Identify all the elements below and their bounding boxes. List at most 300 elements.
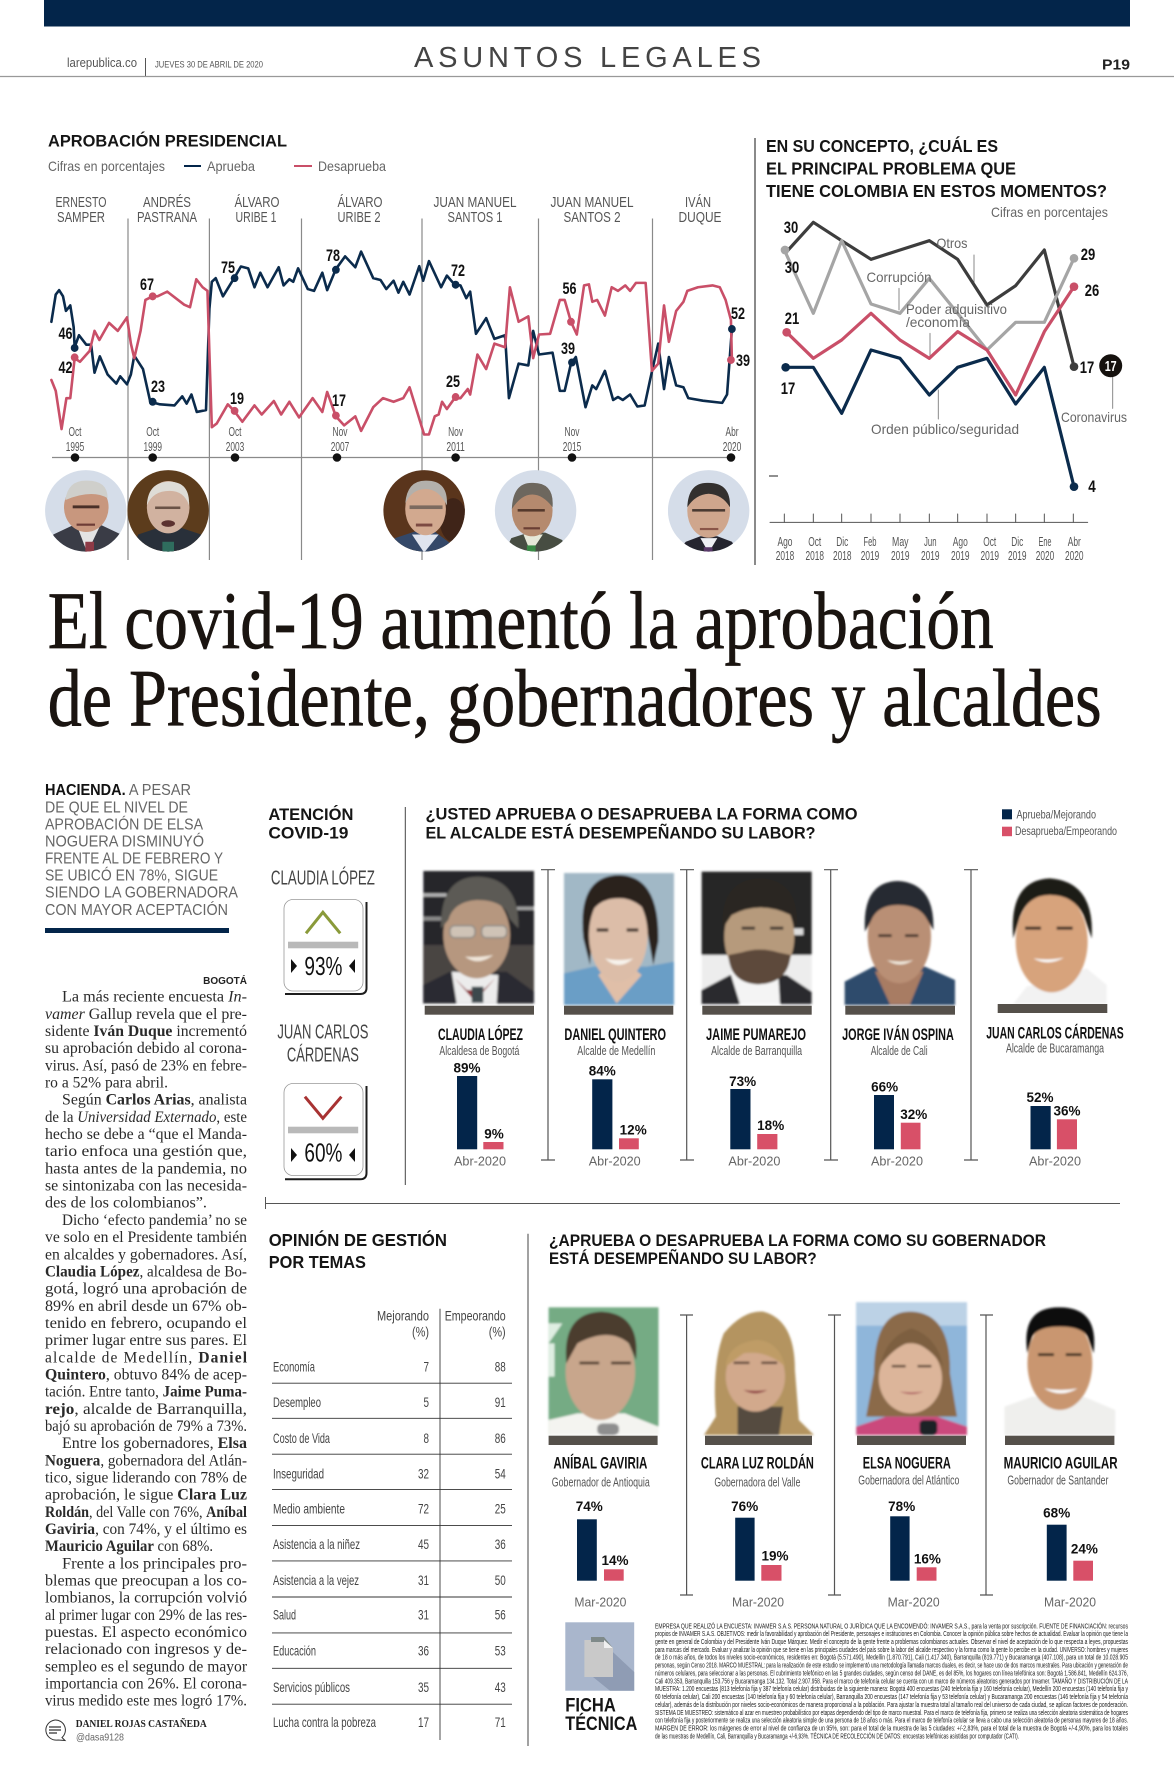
timeline dates: Oct <box>228 424 242 439</box>
bar chart: alcaldes: 9% <box>484 1126 504 1141</box>
governor names <box>553 1453 1118 1472</box>
article body: en alcaldes y gobernadores. Así, <box>45 1246 247 1263</box>
president names <box>56 194 722 226</box>
governor roles: Gobernadora del Atlántico <box>858 1473 959 1487</box>
article body: Noguera, gobernadora del Atlán- <box>45 1452 247 1469</box>
data labels: aprobación: 39 <box>736 351 750 370</box>
article body: blemas que preocupan a los co- <box>45 1572 247 1590</box>
mayor names: DANIEL QUINTERO <box>564 1025 666 1044</box>
bar dates: Abr-2020 <box>454 1154 506 1169</box>
card: 93% <box>284 900 366 994</box>
heading: POR TEMAS <box>269 1252 366 1272</box>
heading: EL ALCALDE ESTÁ DESEMPEÑANDO SU LABOR? <box>426 822 816 842</box>
president names: SANTOS 1 <box>448 210 502 226</box>
table rows: 31 <box>418 1606 429 1622</box>
article body: Gaviria, con 74%, y el último es <box>45 1521 247 1538</box>
card: 60%: 60% <box>304 1138 342 1168</box>
article body: alcalde de Medellín, Daniel <box>45 1349 248 1366</box>
data labels: aprobación: 23 <box>151 377 165 396</box>
mayor roles: Alcaldesa de Bogotá <box>439 1044 519 1058</box>
lead text: hacienda <box>45 782 238 919</box>
governor photos <box>549 1302 1115 1435</box>
table rows: Medio ambiente <box>273 1500 345 1516</box>
legend: Aprueba <box>207 158 255 174</box>
bar dates: Mar-2020 <box>888 1595 940 1610</box>
bar chart: gobernadores <box>576 1499 1098 1581</box>
governor names: ELSA NOGUERA <box>863 1453 951 1472</box>
series labels: Otros <box>936 235 968 251</box>
table header: (%) <box>412 1323 429 1339</box>
x axis dates: Oct <box>808 534 821 549</box>
mayor photos <box>423 871 812 1005</box>
article body: Entre los gobernadores, Elsa <box>62 1435 247 1452</box>
timeline dates: Abr <box>726 424 739 439</box>
governor names: ANÍBAL GAVIRIA <box>553 1453 647 1472</box>
photo: Claudia López <box>423 871 534 1003</box>
x axis dates: 2018 <box>833 548 852 563</box>
x axis dates: 2019 <box>980 548 999 563</box>
data labels: aprobación: 67 <box>140 275 154 294</box>
table rows: 71 <box>495 1714 506 1730</box>
article body: se sintonizaba con las necesida- <box>45 1178 247 1195</box>
byline <box>76 1718 207 1744</box>
x axis dates: May <box>892 534 909 549</box>
bar chart: gobernadores: 14% <box>601 1553 629 1568</box>
x axis dates: Dic <box>1011 534 1024 549</box>
article body: hasta antes de la pandemia, no <box>45 1160 247 1177</box>
table rows: 88 <box>495 1358 506 1374</box>
bar chart: alcaldes: 12% <box>620 1122 647 1137</box>
photo: Elsa Noguera <box>856 1302 967 1435</box>
article body: tación. Entre tanto, Jaime Puma- <box>45 1384 247 1401</box>
article body: importancia con 26%. El corona- <box>45 1676 247 1692</box>
lead text: hacienda: SE UBICÓ EN 78%, SIGUE <box>45 866 218 885</box>
heading: OPINIÓN DE GESTIÓN <box>269 1229 447 1250</box>
photo: Jaime Pumarejo <box>702 872 812 1004</box>
series labels: Corrupción <box>866 269 932 285</box>
timeline dates: 2007 <box>331 439 349 454</box>
table rows: Educación <box>273 1643 316 1659</box>
bar chart: alcaldes: 18% <box>757 1118 784 1133</box>
bar chart: gobernadores: 19% <box>761 1549 789 1564</box>
heading: ¿USTED APRUEBA O DESAPRUEBA LA FORMA COMO <box>426 804 858 823</box>
governor roles <box>552 1473 1108 1490</box>
x axis dates: 2020 <box>1036 548 1054 563</box>
mayor roles <box>439 1041 1104 1058</box>
table rows: Servicios públicos <box>273 1679 350 1695</box>
table rows: 35 <box>418 1679 429 1695</box>
heading: EN SU CONCEPTO, ¿CUÁL ES <box>766 135 998 156</box>
data labels: aprobación: 25 <box>446 372 460 391</box>
timeline dates: 2015 <box>563 439 581 454</box>
heading: ESTÁ DESEMPEÑANDO SU LABOR? <box>549 1248 817 1268</box>
article body: sidente Iván Duque incrementó <box>45 1023 247 1040</box>
legend: Aprueba/Mejorando <box>1016 807 1096 821</box>
data labels: aprobación: 78 <box>326 246 340 265</box>
article body: Según Carlos Arias, analista <box>62 1092 247 1109</box>
table rows: 50 <box>495 1572 506 1588</box>
x axis dates: Abr <box>1068 534 1081 549</box>
table header: Empeorando <box>445 1308 506 1324</box>
heading: ¿APRUEBA O DESAPRUEBA LA FORMA COMO SU GOBERNADOR <box>549 1232 1046 1250</box>
article body <box>45 989 248 1710</box>
article body: relacionado con ingresos y de- <box>45 1641 247 1658</box>
juan carlos cárdenas name: CÁRDENAS <box>287 1044 359 1067</box>
heading: ATENCIÓN <box>268 805 353 824</box>
table rows: Desempleo <box>273 1394 321 1410</box>
panel: aprobación presidencial <box>44 132 751 560</box>
bar chart: alcaldes: 52% <box>1026 1090 1054 1105</box>
heading <box>268 805 353 842</box>
bar dates: Mar-2020 <box>732 1595 784 1610</box>
article body: vamer Gallup revela que el pre- <box>45 1006 247 1023</box>
coronavirus badge: 17 <box>1105 359 1117 375</box>
card: 93%: 93% <box>304 951 342 981</box>
timeline dates <box>66 424 741 454</box>
photo: Mauricio Aguilar <box>1005 1307 1115 1435</box>
timeline dates: Nov <box>332 424 348 439</box>
lead text: hacienda: CON MAYOR ACEPTACIÓN <box>45 900 228 919</box>
lead text: hacienda: APROBACIÓN DE ELSA <box>45 814 203 833</box>
juan carlos cárdenas name: JUAN CARLOS <box>277 1021 368 1043</box>
table rows: Inseguridad <box>273 1465 324 1481</box>
ficha técnica heading: TÉCNICA <box>565 1712 637 1735</box>
data labels: problemas: 30 <box>785 258 799 277</box>
president names: IVÁN <box>685 194 711 211</box>
bar chart: gobernadores: 16% <box>914 1551 941 1566</box>
data labels: problemas: 21 <box>785 309 799 328</box>
article body: virus. Así, pasó de 23% en febre- <box>45 1057 247 1074</box>
table rows: 8 <box>424 1430 429 1446</box>
timeline dates: 2011 <box>446 439 465 454</box>
heading: COVID-19 <box>268 823 348 842</box>
byline: DANIEL ROJAS CASTAÑEDA <box>76 1718 207 1730</box>
heading: EL PRINCIPAL PROBLEMA QUE <box>766 158 1016 178</box>
article body: La más reciente encuesta In- <box>62 989 247 1006</box>
data labels: problemas: 17 <box>781 379 795 398</box>
table rows: 36 <box>418 1643 429 1659</box>
article body: de la Universidad Externado, este <box>45 1109 247 1126</box>
bar chart: alcaldes: 66% <box>871 1080 898 1095</box>
data labels: aprobación: 56 <box>562 279 576 298</box>
ficha técnica text <box>655 1621 1128 1740</box>
data labels: problemas: 30 <box>784 218 798 237</box>
page number: P19 <box>1102 56 1130 74</box>
bar chart: gobernadores: 74% <box>576 1499 603 1514</box>
president names: ERNESTO <box>56 195 106 211</box>
x axis dates <box>776 534 1084 563</box>
x axis <box>770 514 1088 522</box>
bar dates <box>454 1154 1081 1169</box>
timeline dates: 2003 <box>226 439 244 454</box>
header: site and date <box>67 55 263 76</box>
timeline dates: Nov <box>564 424 580 439</box>
data labels: aprobación: 17 <box>332 391 346 410</box>
bar dates <box>574 1595 1096 1610</box>
bar chart: gobernadores: 76% <box>731 1499 758 1514</box>
article body: Frente a los principales pro- <box>62 1555 247 1572</box>
x axis dates: Ago <box>953 534 968 549</box>
article body: tenido en febrero, ocupando el <box>45 1315 247 1332</box>
table rows: 31 <box>418 1572 429 1588</box>
mayor names: JAIME PUMAREJO <box>706 1025 806 1044</box>
table rows: 25 <box>495 1500 506 1516</box>
table rows: 54 <box>495 1465 506 1481</box>
heading <box>549 1232 1046 1268</box>
bar dates: Abr-2020 <box>728 1154 780 1169</box>
timeline dates: 2020 <box>723 439 741 454</box>
photo: Juan Carlos Cárdenas <box>1013 878 1107 1004</box>
panel: opinión de gestión <box>269 1229 512 1740</box>
data labels: problemas: 17 <box>1080 358 1094 377</box>
table header: Mejorando <box>377 1308 429 1324</box>
column dividers <box>680 1315 993 1595</box>
article body: Dicho ‘efecto pandemia’ no se <box>62 1212 247 1229</box>
governor names: CLARA LUZ ROLDÁN <box>701 1453 814 1472</box>
article body: 89% en abril desde un 67% ob- <box>45 1298 247 1315</box>
x axis dates: Ene <box>1038 534 1052 549</box>
x axis dates: 2019 <box>921 548 940 563</box>
data labels: aprobación: 39 <box>561 339 575 358</box>
photo: Daniel Quintero <box>564 873 674 1005</box>
table rows: 32 <box>418 1465 429 1481</box>
table rows: Lucha contra la pobreza <box>273 1714 376 1730</box>
x axis dates: Dic <box>836 534 849 549</box>
x axis dates: 2019 <box>861 548 879 563</box>
x axis dates: Ago <box>778 534 792 549</box>
president names: SAMPER <box>57 210 105 226</box>
timeline axis <box>52 453 735 462</box>
header: site and date: JUEVES 30 DE ABRIL DE 2020 <box>155 60 263 70</box>
table rows: 43 <box>495 1679 506 1695</box>
article body: puestas. El aspecto económico <box>45 1624 247 1641</box>
president names: ÁLVARO <box>234 194 280 211</box>
governor roles: Gobernador de Santander <box>1007 1473 1108 1487</box>
subtitle: Cifras en porcentajes <box>991 204 1108 220</box>
x axis dates: 2018 <box>776 548 794 563</box>
series labels: Coronavirus <box>1061 409 1127 425</box>
article body: sempleo es el segundo de mayor <box>45 1658 248 1675</box>
coronavirus badge <box>1099 354 1122 377</box>
x axis dates: 2019 <box>1008 548 1027 563</box>
article body: des de los colombianos”. <box>45 1195 207 1212</box>
president names: JUAN MANUEL <box>550 195 634 211</box>
series labels: Orden público/seguridad <box>871 421 1019 437</box>
photo: Aníbal Gaviria <box>549 1307 659 1435</box>
president portraits <box>44 469 751 553</box>
president names: DUQUE <box>678 210 722 226</box>
article body: virus medido este mes logró 17%. <box>45 1693 247 1710</box>
x axis dates: Feb <box>864 534 876 549</box>
timeline dates: Oct <box>146 424 159 439</box>
main headline: El covid-19 aumentó la aprobación <box>48 575 994 666</box>
bar dates: Abr-2020 <box>871 1154 923 1169</box>
icon: ficha técnica document <box>565 1622 634 1691</box>
president names: URIBE 1 <box>236 210 276 226</box>
table rows: Salud <box>273 1606 296 1622</box>
byline: @dasa9128 <box>76 1732 124 1744</box>
bar chart: alcaldes <box>453 1060 1081 1149</box>
article body: aprobación, le sigue Clara Luz <box>45 1487 247 1504</box>
card: 60% <box>284 1084 366 1179</box>
header bar <box>44 0 1130 26</box>
heading: TIENE COLOMBIA EN ESTOS MOMENTOS? <box>766 181 1107 201</box>
bar chart: alcaldes: 84% <box>589 1064 616 1079</box>
line chart: aprobación <box>51 252 736 435</box>
legend <box>48 158 386 174</box>
mayor roles: Alcalde de Barranquilla <box>711 1044 802 1058</box>
x axis dates: 2018 <box>805 548 824 563</box>
data labels: problemas: 29 <box>1081 245 1095 264</box>
timeline dates: 1995 <box>66 439 84 454</box>
table rows: 36 <box>495 1536 506 1552</box>
x axis dates: 2019 <box>951 548 970 563</box>
heading <box>426 804 858 842</box>
article body: Claudia López, alcaldesa de Bo- <box>45 1263 247 1280</box>
table rows: 45 <box>418 1536 429 1552</box>
photo: Clara Luz Roldán <box>704 1312 814 1435</box>
data labels: problemas: 4 <box>1088 477 1096 496</box>
data labels: aprobación: 46 <box>58 324 72 343</box>
photos: Ospina and Cárdenas <box>845 878 1107 1005</box>
lead text: hacienda: FRENTE AL DE FEBRERO Y <box>45 850 223 867</box>
table rows: 56 <box>495 1606 506 1622</box>
governor roles: Gobernadora del Valle <box>714 1476 800 1490</box>
heading <box>766 135 1107 201</box>
panel: principal problema <box>755 135 1127 565</box>
table rows: 7 <box>424 1358 429 1374</box>
president names: ÁLVARO <box>338 194 382 211</box>
timeline dates: Nov <box>448 424 463 439</box>
table header: (%) <box>489 1323 506 1339</box>
table rows: 17 <box>418 1714 429 1730</box>
lead text: hacienda: SIENDO LA GOBERNADORA <box>45 885 238 902</box>
data labels: aprobación: 75 <box>221 258 235 277</box>
mayor names <box>438 1023 1124 1044</box>
table rows <box>273 1358 506 1730</box>
article body: tico, sigue liderando con 78% de <box>45 1470 247 1486</box>
president names: PASTRANA <box>137 210 197 226</box>
article body: tario enfoca una gestión que, <box>45 1143 247 1160</box>
table rows: Asistencia a la niñez <box>273 1536 360 1552</box>
article body: rejo, alcalde de Barranquilla, <box>45 1401 247 1418</box>
article body: al primer lugar con 29% de las res- <box>45 1607 247 1624</box>
bar dates: Abr-2020 <box>1029 1154 1081 1169</box>
bar chart: alcaldes: 89% <box>453 1060 481 1075</box>
article body: bajó su aprobación de 79% a 73%. <box>45 1418 247 1435</box>
legend: Desaprueba <box>318 158 386 174</box>
bar chart: gobernadores: 68% <box>1043 1506 1070 1521</box>
table rows: 5 <box>424 1394 429 1410</box>
heading <box>269 1229 447 1272</box>
lead text: hacienda: DE QUE EL NIVEL DE <box>45 799 188 816</box>
panel: gobernadores <box>549 1232 1118 1610</box>
dateline: BOGOTÁ <box>203 974 247 987</box>
header: site and date: larepublica.co <box>67 55 137 70</box>
mayor roles: Alcalde de Bucaramanga <box>1006 1041 1104 1055</box>
x axis dates: 2020 <box>1065 548 1084 563</box>
bar chart: gobernadores: 24% <box>1071 1541 1098 1556</box>
mayor roles: Alcalde de Cali <box>871 1044 928 1058</box>
data labels: aprobación <box>58 246 750 410</box>
article body: ve solo en el Presidente también <box>45 1229 247 1246</box>
article body: primer lugar entre sus pares. El <box>45 1332 247 1349</box>
mayor roles: Alcalde de Medellín <box>577 1044 655 1058</box>
table rows: 91 <box>495 1394 506 1410</box>
article body: hecho se debe a “que el Manda- <box>45 1126 247 1143</box>
table rows: 53 <box>495 1643 506 1659</box>
president names: SANTOS 2 <box>564 210 620 226</box>
line chart: problemas <box>781 222 1113 491</box>
bar dates: Mar-2020 <box>574 1595 626 1610</box>
mayor names: CLAUDIA LÓPEZ <box>438 1025 523 1044</box>
lead text: hacienda: HACIENDA. A PESAR <box>45 782 191 799</box>
data labels: problemas <box>781 218 1099 496</box>
x axis dates: Oct <box>983 534 996 549</box>
bar dates: Abr-2020 <box>589 1154 641 1169</box>
legend: Cifras en porcentajes <box>48 158 165 174</box>
ficha técnica heading: FICHA <box>565 1695 616 1717</box>
series labels: /economía <box>906 314 970 330</box>
article body: ro a 52% para abril. <box>45 1075 168 1092</box>
data labels: problemas: 26 <box>1085 281 1099 300</box>
legend <box>1002 807 1117 838</box>
mayor names: JORGE IVÁN OSPINA <box>842 1025 954 1044</box>
article body: lombianos, la corrupción volvió <box>45 1590 247 1607</box>
president names: JUAN MANUEL <box>434 195 516 211</box>
president names: ANDRÉS <box>143 194 191 211</box>
president names: URIBE 2 <box>338 210 380 226</box>
table header <box>377 1308 506 1339</box>
bar chart: gobernadores: 78% <box>888 1499 915 1514</box>
photo base bars <box>425 1004 1107 1015</box>
panel: atención covid-19 <box>268 805 375 1179</box>
photo: Jorge Iván Ospina <box>845 881 955 1005</box>
column dividers <box>541 870 978 1160</box>
data labels: aprobación: 52 <box>731 304 745 323</box>
data labels: aprobación: 19 <box>230 389 244 408</box>
x axis dates: 2019 <box>891 548 910 563</box>
series labels <box>866 235 1127 437</box>
governor names: MAURICIO AGUILAR <box>1004 1453 1118 1472</box>
section title: ASUNTOS LEGALES <box>414 42 761 74</box>
table rows: 86 <box>495 1430 506 1446</box>
bar chart: alcaldes: 73% <box>729 1074 756 1089</box>
juan carlos cárdenas name <box>277 1021 368 1067</box>
photo base bars <box>549 1436 1114 1445</box>
data labels: aprobación: 42 <box>58 358 72 377</box>
governor roles: Gobernador de Antioquia <box>552 1476 650 1490</box>
table rows: Economía <box>273 1358 315 1374</box>
article body: Roldán, del Valle con 76%, Aníbal <box>45 1504 248 1521</box>
series labels: Poder adquisitivo <box>906 301 1007 317</box>
legend: Desaprueba/Empeorando <box>1015 824 1117 838</box>
claudia lópez name: CLAUDIA LÓPEZ <box>271 866 375 889</box>
panel: alcaldes <box>423 804 1124 1169</box>
heading: APROBACIÓN PRESIDENCIAL <box>48 132 287 150</box>
x axis dates: Jun <box>924 534 937 549</box>
bar chart: alcaldes: 32% <box>900 1107 927 1122</box>
article body: Quintero, obtuvo 84% de acep- <box>45 1366 247 1384</box>
article body: Mauricio Aguilar con 68%. <box>45 1538 213 1555</box>
lead text: hacienda: NOGUERA DISMINUYÓ <box>45 832 204 851</box>
timeline dates: Oct <box>68 424 82 439</box>
article body: gotá, logró una aprobación de <box>45 1281 247 1298</box>
timeline dates: 1999 <box>143 439 162 454</box>
article body: su aprobación debido al corona- <box>45 1040 247 1057</box>
data labels: aprobación: 72 <box>451 261 465 280</box>
bar chart: alcaldes: 36% <box>1053 1104 1081 1119</box>
